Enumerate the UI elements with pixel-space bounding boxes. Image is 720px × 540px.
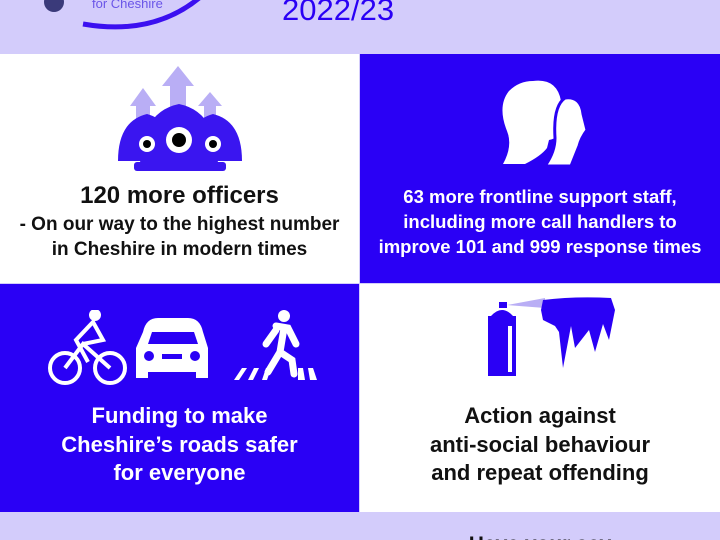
- panel: officers: [0, 54, 359, 283]
- panel: bottom left: [0, 514, 359, 540]
- text: roads: Funding to make: [92, 403, 268, 428]
- logo: [44, 0, 201, 30]
- heading: 120 more officers: 120 more officers: [80, 182, 279, 209]
- text: anti-social behaviour: anti-social behaviour: [430, 432, 650, 456]
- text: support staff: improve 101 and 999 response times: [379, 236, 701, 257]
- panel: anti-social behaviour: [360, 284, 720, 512]
- text: roads: [61, 403, 298, 485]
- panel: have your say: [361, 514, 719, 540]
- icon: police helmets: [118, 66, 242, 171]
- text: officers description: [20, 214, 340, 260]
- text: support staff: 63 more frontline support staff,: [403, 186, 677, 207]
- text: anti-social behaviour: Action against: [464, 403, 616, 428]
- icon: spray can: [488, 297, 615, 376]
- text: officers description: in Cheshire in modern times: [52, 239, 307, 260]
- icons: cyclist, car, pedestrian: [48, 310, 317, 385]
- text: support staff: [379, 186, 701, 257]
- text: support staff: including more call handlers to: [403, 211, 677, 232]
- text: officers description: - On our way to the highest number: [20, 214, 339, 235]
- icon: call handlers: [502, 80, 586, 164]
- header: [0, 0, 720, 54]
- text: roads: for everyone: [113, 460, 246, 485]
- panel: roads: [0, 284, 359, 512]
- text: roads: Cheshire’s roads safer: [61, 432, 298, 456]
- text: anti-social behaviour: [430, 403, 650, 485]
- text: anti-social behaviour: and repeat offending: [431, 460, 649, 485]
- panel: support staff: [360, 54, 720, 283]
